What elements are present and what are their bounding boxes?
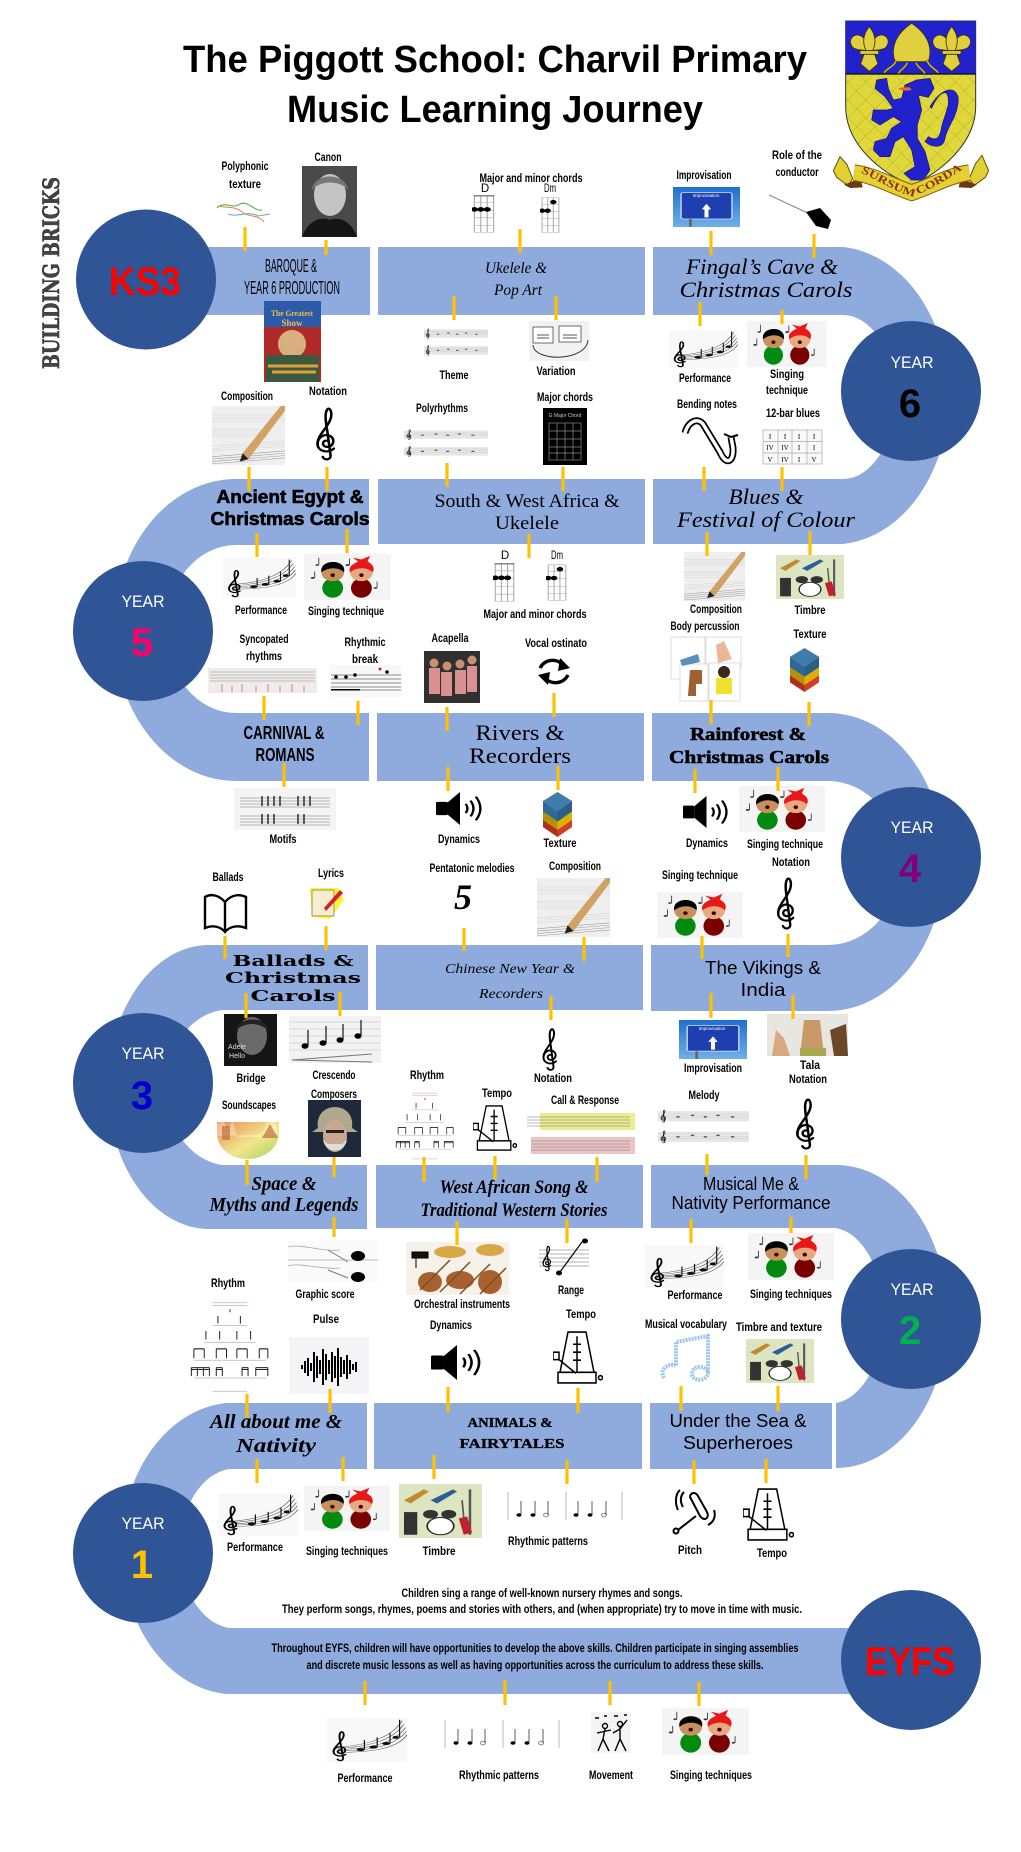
skill: major and minor chords Y5 — [484, 534, 586, 621]
skill: motifs — [234, 763, 336, 846]
skill: singing techniques Y1: Singing techniques — [306, 1546, 388, 1558]
skill: notation Musical Me — [789, 1074, 827, 1179]
unit titles: Year 4/5 row: Rainforest & — [690, 724, 806, 744]
skill: notation Vikings: Notation — [772, 857, 810, 869]
title: The Piggott School: Charvil Primary — [183, 39, 807, 81]
skill: bridge: Adele — [228, 1044, 246, 1051]
unit titles: Year 5/6 row: Ancient Egypt & — [216, 487, 364, 507]
skill: syncopated rhythms: rhythms — [246, 651, 282, 663]
skill: timbre and texture — [736, 1322, 822, 1411]
unit titles: Year 1/2 row: ANIMALS & — [468, 1416, 552, 1431]
skill: crescendo: Crescendo — [312, 1070, 356, 1082]
skill: singing technique Y5: Singing technique — [308, 606, 384, 618]
circle: Year 1: 1 — [131, 1543, 153, 1587]
unit titles: Year 2/3 row: Musical Me & — [703, 1174, 799, 1194]
skill: composition Y6 — [684, 532, 745, 616]
skill: rhythmic break: Rhythmic — [344, 637, 386, 649]
skill: 12-bar blues: I — [798, 456, 801, 464]
skill: 12-bar blues: IV — [781, 444, 789, 452]
EYFS text block: Throughout EYFS, children will have opportunities to develop the above skills. Children participate in singing assemblies — [272, 1643, 798, 1655]
skill: timbre Y6 — [776, 531, 844, 617]
skill: rhythm West African — [396, 1070, 453, 1182]
skill: major and minor chords Y5: Major and minor chords — [484, 609, 586, 621]
unit titles: Year 2/3 row: West African Song & — [440, 1177, 589, 1198]
EYFS text block: Children sing a range of well-known nursery rhymes and songs. — [402, 1588, 682, 1600]
unit titles: Year 2/3 row: Myths and Legends — [209, 1194, 359, 1216]
skill: range: Range — [558, 1285, 584, 1297]
skill: tempo West African — [473, 1088, 517, 1180]
skill: singing techniques Y2 — [748, 1217, 834, 1301]
skill: performance Y6 — [669, 302, 738, 385]
unit titles: Year 5/6 row: Blues & — [728, 484, 804, 509]
skill: singing technique Vikings — [657, 870, 743, 959]
skill: dynamics Rivers — [436, 767, 480, 846]
journey road band — [108, 247, 949, 1694]
skill: role of the conductor: Role of the — [772, 150, 822, 162]
unit titles: Year 4/5 row: ROMANS — [256, 745, 314, 765]
skill: pentatonic melodies: Pentatonic melodies — [430, 863, 514, 875]
unit titles: Year 5/6 row: South & West Africa & — [434, 491, 620, 512]
skill: texture Y4 — [790, 629, 826, 726]
skill: singing technique Vikings: Singing technique — [662, 870, 738, 882]
skill: improvisation Y6 — [673, 170, 740, 255]
skill: dynamics Y4: Dynamics — [686, 838, 728, 850]
skill: timbre Y6: Timbre — [794, 605, 826, 617]
skill: range — [539, 1219, 589, 1297]
skill: composition Y5: Composition — [221, 391, 273, 403]
skill: singing techniques Y2: Singing techniques — [750, 1289, 832, 1301]
skill: lyrics: Lyrics — [318, 868, 344, 880]
unit titles: Year 5/6 row: Festival of Colour — [676, 507, 855, 532]
skill: singing technique Y6: technique — [766, 385, 808, 397]
skill: tempo Under the Sea — [743, 1459, 793, 1560]
unit titles: KS3 row: BAROQUE & — [265, 256, 317, 276]
unit titles: Year 1/2 row: FAIRYTALES — [460, 1437, 565, 1452]
unit titles: KS3 row: Ukelele & — [485, 260, 548, 277]
skill: acapella: Acapella — [432, 633, 469, 645]
poster: The Greatest Show: Show — [281, 318, 303, 328]
skill: 12-bar blues: IV — [781, 456, 789, 464]
skill: crescendo — [289, 992, 381, 1082]
skill: 12-bar blues: I — [813, 444, 816, 452]
skill: composition Chinese New Year — [537, 861, 610, 961]
skill: rhythmic break — [330, 637, 402, 725]
skill: rhythm Y1: Rhythm — [211, 1278, 245, 1290]
skill: bending notes — [677, 399, 738, 491]
skill: major and minor chords Y5: Dm — [551, 550, 563, 562]
skill: performance Y2: Performance — [668, 1290, 722, 1302]
unit titles: Year 1/2 row: Superheroes — [683, 1433, 793, 1453]
skill: variation: Variation — [536, 366, 576, 378]
skill: vocal ostinato: Vocal ostinato — [525, 638, 587, 650]
unit titles: Year 1/2 row: Nativity — [235, 1435, 316, 1457]
skill: performance Y1: Performance — [227, 1542, 283, 1554]
skill: role of the conductor — [769, 150, 831, 258]
skill: movement: Movement — [589, 1770, 633, 1782]
skill: lyrics — [310, 868, 344, 950]
circle: Year 3 — [73, 1013, 213, 1153]
skill: bridge: Hello — [229, 1053, 245, 1060]
skill: singing technique Y4 — [739, 767, 825, 851]
skill: orchestral instruments — [406, 1221, 510, 1311]
unit titles: Year 2/3 row: Nativity Performance — [672, 1193, 830, 1213]
unit titles: KS3 row: Pop Art — [493, 282, 543, 299]
circle: Year 4: YEAR — [890, 819, 934, 837]
skill: composition Y5 — [212, 391, 285, 491]
skill: pitch — [674, 1460, 715, 1557]
circle: Year 6: 6 — [899, 382, 921, 426]
skill: singing technique Y4: Singing technique — [747, 839, 823, 851]
skill: graphic score: Graphic score — [296, 1289, 354, 1301]
unit titles: Year 4/5 row: Rivers & — [476, 720, 564, 745]
unit titles: Year 3/4 row — [225, 952, 821, 1005]
skill: singing techniques EYFS: Singing techniques — [670, 1770, 752, 1782]
EYFS text block — [272, 1588, 802, 1672]
skill: ballads — [205, 872, 246, 959]
circle: Year 5: YEAR — [122, 593, 165, 611]
skill: canon: Canon — [314, 152, 342, 164]
skill: polyphonic texture: texture — [229, 179, 261, 191]
unit titles: Year 3/4 row: Ballads & — [232, 952, 354, 970]
skill: 12-bar blues: IV — [766, 444, 774, 452]
skill: 12-bar blues: 12-bar blues — [766, 408, 820, 420]
unit titles: Year 3/4 row: India — [740, 980, 787, 1000]
skill: tala — [767, 995, 848, 1072]
unit titles: Year 3/4 row: The Vikings & — [705, 958, 821, 978]
skill: performance EYFS: Performance — [338, 1773, 392, 1785]
skill: role of the conductor: conductor — [776, 167, 819, 179]
skill: polyrhythms: Polyrhythms — [416, 403, 468, 415]
skill: acapella — [424, 633, 480, 731]
skill: major and minor chords KS3: D — [481, 183, 489, 195]
skill: singing technique Y5 — [304, 529, 391, 618]
EYFS text block: They perform songs, rhymes, poems and stories with others, and (when appropriate) try to move in time with music. — [282, 1604, 802, 1616]
school crest: SURSUM CORDA — [862, 166, 962, 197]
poster: The Greatest Show — [264, 301, 321, 382]
skill: motifs: Motifs — [270, 834, 296, 846]
skill: 12-bar blues: I — [784, 433, 787, 441]
skill: 12-bar blues: I — [769, 433, 772, 441]
skill: dynamics Y4 — [683, 769, 728, 850]
skill: major and minor chords KS3: Dm — [544, 183, 556, 195]
unit titles: Year 4/5 row: Christmas Carols — [669, 747, 829, 767]
skill: 12-bar blues — [763, 408, 822, 491]
title: Music Learning Journey — [287, 89, 703, 131]
skill: rhythm West African: Rhythm — [410, 1070, 444, 1082]
skill: polyphonic texture: Polyphonic — [222, 161, 269, 173]
circle: KS3 — [76, 210, 216, 350]
skill: timbre Y1: Timbre — [422, 1546, 456, 1558]
skill: dynamics Y1: Dynamics — [430, 1320, 472, 1332]
skill: tala: Tala — [800, 1060, 821, 1072]
skill: body percussion — [670, 621, 741, 724]
unit titles: Year 3/4 row: Recorders — [478, 987, 544, 1002]
circle: Year 6 — [841, 321, 981, 461]
skill: syncopated rhythms: Syncopated — [240, 634, 288, 646]
skill: major chords: G Major Chord — [549, 413, 582, 419]
skill: major and minor chords KS3: Major and minor chords — [480, 173, 582, 185]
skill: bending notes: Bending notes — [677, 399, 737, 411]
skill: timbre Y1 — [399, 1455, 482, 1558]
circle: Year 2 — [841, 1249, 981, 1389]
circle: Year 3: 3 — [131, 1074, 153, 1118]
circle: KS3: KS3 — [109, 260, 181, 304]
circle: Year 2: 2 — [899, 1309, 921, 1353]
unit titles: Year 1/2 row — [208, 1411, 806, 1457]
circle: Year 4 — [841, 787, 981, 927]
skill: performance Y6: Performance — [679, 373, 731, 385]
skill: performance EYFS — [327, 1681, 407, 1785]
skill: polyphonic texture — [217, 161, 270, 251]
skill: tempo Y1: Tempo — [566, 1309, 596, 1321]
circle: Year 3: YEAR — [122, 1045, 165, 1063]
EYFS text block: and discrete music lessons as well as having opportunities across the curriculum to address these skills. — [306, 1660, 764, 1672]
circle: Year 2: YEAR — [890, 1281, 934, 1299]
skill: 12-bar blues: I — [798, 444, 801, 452]
skill: texture Rivers — [543, 766, 576, 850]
skill: dynamics Y1 — [430, 1320, 479, 1412]
skill: improvisation Vikings: Improvisation — [684, 1063, 742, 1075]
skill: rhythmic patterns EYFS — [445, 1680, 559, 1782]
skill: vocal ostinato — [525, 638, 587, 717]
unit titles: KS3 row — [244, 254, 852, 302]
skill: performance Y5: Performance — [235, 605, 287, 617]
skill: 12-bar blues: V — [767, 456, 773, 464]
skill: improvisation Vikings — [679, 993, 747, 1075]
skill: pitch: Pitch — [678, 1545, 702, 1557]
skill: singing technique Y6: Singing — [770, 369, 804, 381]
unit titles: Year 1/2 row: All about me & — [208, 1411, 342, 1433]
skill: improvisation Y6: Improvisation — [676, 170, 732, 182]
unit titles: Year 1/2 row: Under the Sea & — [670, 1411, 806, 1431]
skill: notation Vikings — [772, 857, 810, 957]
skill: performance Y5 — [223, 533, 296, 617]
skill: improvisation Y6: Improvisation — [693, 193, 720, 198]
circle: Year 4: 4 — [899, 847, 922, 891]
skill: pulse: Pulse — [313, 1314, 339, 1326]
skill: timbre and texture: Timbre and texture — [736, 1322, 822, 1334]
unit titles: Year 4/5 row: Recorders — [469, 743, 571, 768]
unit titles: Year 5/6 row — [210, 484, 855, 534]
skill: rhythmic patterns EYFS: Rhythmic patterns — [459, 1770, 539, 1782]
skill: ballads: Ballads — [212, 872, 244, 884]
skill: composers: Composers — [311, 1089, 357, 1101]
unit titles: Year 4/5 row — [244, 720, 829, 768]
skill: 12-bar blues: I — [813, 433, 816, 441]
skill: texture Rivers: Texture — [544, 838, 576, 850]
circle: EYFS — [841, 1590, 981, 1730]
unit titles: Year 2/3 row: Space & — [252, 1173, 317, 1195]
skill: theme — [424, 296, 488, 382]
skill: variation — [529, 296, 589, 378]
skill: composition Y6: Composition — [690, 604, 742, 616]
skill: pulse — [289, 1314, 369, 1413]
skill: major and minor chords KS3 — [471, 173, 582, 253]
skill: composers — [308, 1089, 361, 1177]
skill: 12-bar blues: I — [798, 433, 801, 441]
skill: composition Chinese New Year: Composition — [549, 861, 601, 873]
unit titles: Year 4/5 row: CARNIVAL & — [244, 723, 324, 743]
skill: melody: Melody — [688, 1090, 720, 1102]
skill: musical vocabulary — [645, 1319, 727, 1411]
skill: pentatonic melodies: 5 — [454, 877, 472, 917]
skill: call and response: Call & Response — [551, 1095, 619, 1107]
skill: tempo Under the Sea: Tempo — [757, 1548, 787, 1560]
unit titles: KS3 row: Fingal’s Cave & — [685, 254, 839, 279]
skill: notation Musical Me: Notation — [789, 1074, 827, 1086]
unit titles: Year 2/3 row: Traditional Western Stories — [420, 1200, 608, 1221]
skill: syncopated rhythms — [208, 634, 317, 720]
skill: tempo West African: Tempo — [482, 1088, 512, 1100]
skill: rhythmic break: break — [352, 654, 379, 666]
unit titles: KS3 row: YEAR 6 PRODUCTION — [244, 278, 340, 298]
skill: singing technique Y6 — [747, 310, 827, 397]
skill: bridge: Bridge — [236, 1073, 266, 1085]
circle: Year 5: 5 — [131, 621, 153, 665]
skill: improvisation Vikings: Improvisation — [699, 1026, 726, 1031]
skill: soundscapes — [217, 1100, 279, 1185]
side heading: building bricks: BUILDING BRICKS — [39, 177, 65, 369]
skill: graphic score — [288, 1217, 378, 1301]
skill: rhythm Y1 — [191, 1278, 268, 1418]
skill: notation Chinese New Year — [534, 996, 572, 1085]
circle: Year 5 — [73, 561, 213, 701]
skill: rhythmic patterns Y1: Rhythmic patterns — [508, 1536, 588, 1548]
skill: polyrhythms — [404, 403, 488, 487]
skill: body percussion: Body percussion — [670, 621, 740, 633]
skill: performance Y1 — [218, 1459, 298, 1554]
skill: melody — [658, 1090, 749, 1175]
skill: theme: Theme — [440, 370, 468, 382]
unit titles: Year 3/4 row: Chinese New Year & — [445, 962, 575, 977]
school crest — [832, 20, 990, 202]
unit titles: KS3 row: Christmas Carols — [680, 277, 852, 302]
skill: major chords — [537, 392, 593, 491]
skill: musical vocabulary: Musical vocabulary — [645, 1319, 727, 1331]
skill: canon — [302, 152, 357, 255]
circle: EYFS: EYFS — [865, 1640, 955, 1684]
unit titles: Year 3/4 row: Carols — [250, 987, 336, 1005]
skill: orchestral instruments: Orchestral instruments — [414, 1299, 510, 1311]
skill: texture Y4: Texture — [794, 629, 826, 641]
circle: Year 6: YEAR — [890, 354, 934, 372]
circle: Year 1: YEAR — [122, 1515, 165, 1533]
skill: singing techniques Y1 — [304, 1457, 390, 1558]
circle: Year 1 — [73, 1483, 213, 1623]
skill: call and response — [527, 1095, 635, 1182]
unit titles: Year 3/4 row: Christmas — [225, 969, 361, 987]
unit titles: Year 5/6 row: Christmas Carols — [210, 509, 370, 529]
skill: performance Y2 — [645, 1219, 724, 1302]
skill: notation Chinese New Year: Notation — [534, 1073, 572, 1085]
skill: major and minor chords Y5: D — [501, 550, 509, 562]
skill: tempo Y1 — [553, 1309, 602, 1413]
skill: movement — [589, 1681, 633, 1782]
skill: soundscapes: Soundscapes — [222, 1100, 276, 1112]
skill: singing techniques EYFS — [662, 1682, 752, 1782]
skill: dynamics Rivers: Dynamics — [438, 834, 480, 846]
skill: notation Y5: Notation — [309, 386, 347, 398]
unit titles: Year 5/6 row: Ukelele — [495, 513, 559, 534]
skill: notation Y5 — [309, 386, 347, 491]
poster: The Greatest Show: The Greatest — [271, 309, 313, 318]
skill: rhythmic patterns Y1 — [508, 1460, 622, 1548]
skill: pentatonic melodies — [430, 863, 514, 951]
skill: major chords: Major chords — [537, 392, 593, 404]
skill: bridge — [224, 993, 277, 1085]
title — [183, 39, 807, 131]
unit titles: Year 2/3 row — [209, 1173, 830, 1221]
skill: 12-bar blues: V — [811, 456, 817, 464]
